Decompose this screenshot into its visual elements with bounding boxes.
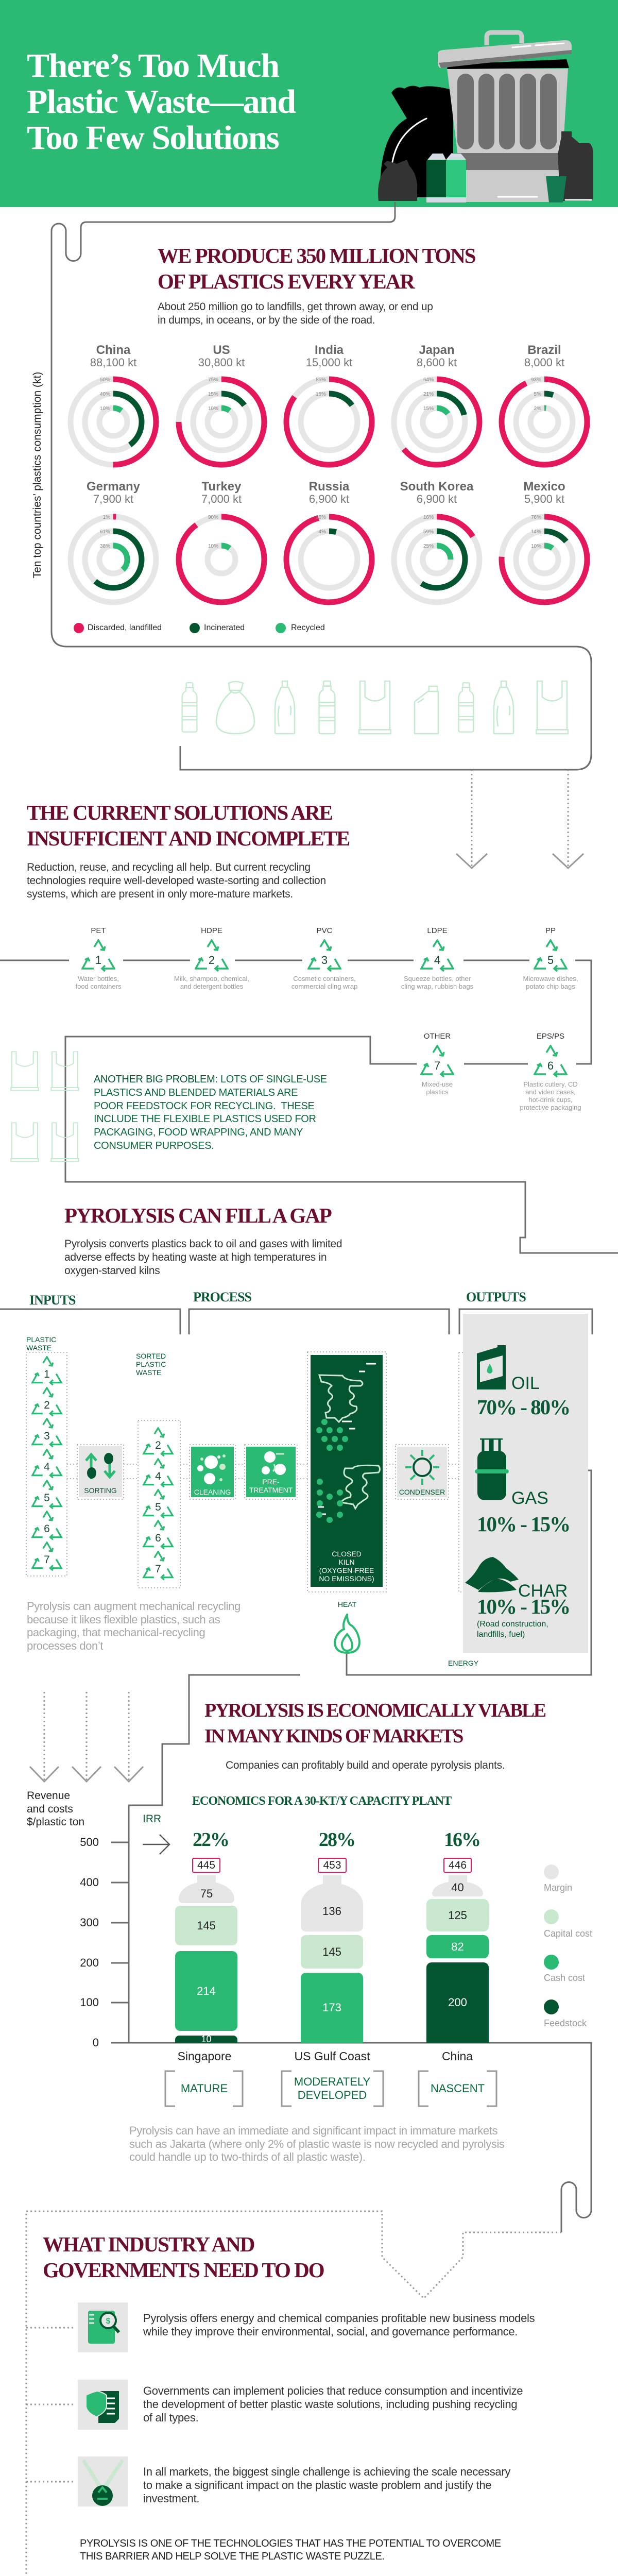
country names: 15,000 kt (306, 356, 352, 369)
Mexico (502, 515, 587, 602)
plastic waste stack: WASTE (26, 1344, 52, 1352)
country names: 7,900 kt (93, 493, 133, 505)
gray note: augment recycling: Pyrolysis can augment mechanical recycling (27, 1600, 241, 1613)
bar: China (426, 1875, 489, 2043)
recycling codes row: Milk, shampoo, chemical, (174, 975, 249, 982)
country names: US (213, 343, 230, 357)
closed kiln: CLOSED (332, 1550, 362, 1558)
heading: what industry and governments need to do: WHAT INDUSTRY AND (43, 2232, 254, 2256)
gray note: augment recycling: because it likes flexible plastics, such as (27, 1613, 220, 1626)
revenue boxes (192, 1858, 220, 1873)
Germany (71, 515, 156, 602)
market labels: MODERATELY (294, 2075, 370, 2088)
Brazil: 93% (531, 377, 541, 383)
gray note: jakarta: Pyrolysis can have an immediate and significant impact in immature markets (129, 2124, 497, 2137)
plastic waste stack: 3 (44, 1430, 50, 1442)
market labels: Singapore (178, 2049, 231, 2063)
market labels (165, 2049, 497, 2107)
heading: current solutions (27, 801, 349, 850)
recycling codes row: EPS/PS (537, 1032, 564, 1041)
Germany: 61% (100, 529, 110, 535)
recycling codes row: PVC (317, 926, 332, 935)
Russia: 96% (316, 515, 326, 520)
callout: another big problem: INCLUDE THE FLEXIBLE PLASTICS USED FOR (94, 1113, 316, 1125)
heading: economically viable: PYROLYSIS IS ECONOMICALLY VIABLE (204, 1700, 545, 1721)
heading: what industry and governments need to do (43, 2232, 324, 2282)
Japan: 21% (423, 392, 434, 397)
axis title: revenue and costs: and costs (27, 1803, 73, 1815)
Turkey: 10% (208, 544, 218, 549)
plastic waste stack: PLASTIC (26, 1335, 56, 1344)
item 3: scale challenge (78, 2456, 511, 2506)
axis title: revenue and costs: Revenue (27, 1790, 70, 1802)
heading: 350 million tons: OF PLASTICS EVERY YEAR (158, 269, 414, 293)
recycling codes row: food containers (76, 982, 121, 990)
y axis labels: 200 (80, 1956, 99, 1969)
recycling codes row: 6 (547, 1059, 554, 1072)
recycling codes row: Squeeze bottles, other (404, 975, 471, 982)
legend: cost components: Capital cost (544, 1928, 592, 1939)
country names: Germany (87, 480, 140, 494)
heading: current solutions: INSUFFICIENT AND INCOMPLETE (27, 826, 349, 850)
stacked bar chart: 446 (449, 1859, 467, 1871)
section labels: inputs process outputs (29, 1290, 526, 1308)
recycling codes row: plastics (426, 1088, 449, 1096)
bar: China: 125 (448, 1909, 467, 1922)
market labels: DEVELOPED (298, 2089, 367, 2102)
y axis labels: 0 (93, 2036, 99, 2049)
Turkey: 90% (208, 515, 218, 520)
Brazil: 5% (534, 392, 541, 397)
heading: pyrolysis gap: PYROLYSIS CAN FILL A GAP (64, 1204, 331, 1227)
country names: South Korea (400, 480, 473, 494)
closing statement: PYROLYSIS IS ONE OF THE TECHNOLOGIES THAT HAS THE POTENTIAL TO OVERCOME (80, 2538, 501, 2549)
callout: another big problem: PACKAGING, FOOD WRAPPING, AND MANY (94, 1127, 303, 1138)
heading: economically viable (204, 1700, 546, 1747)
country names: 8,600 kt (417, 356, 457, 369)
recycling codes row: potato chip bags (526, 982, 575, 990)
title: Plastic Waste—and (27, 83, 295, 121)
IRR label and arrow: IRR (143, 1813, 161, 1825)
icon: document with magnifier (78, 2302, 128, 2352)
Mexico: 14% (531, 529, 541, 535)
sorted plastic waste: 5 (155, 1501, 161, 1513)
bar: US Gulf Coast: 173 (322, 2001, 341, 2014)
pretreatment box: PRE- (262, 1478, 280, 1486)
plastic waste stack (26, 1335, 63, 1571)
legend: ring charts: Discarded, landfilled (88, 623, 162, 632)
plastic waste stack: 4 (44, 1461, 50, 1473)
output: oil (477, 1345, 570, 1419)
illustration: trash can with bags and bottles (378, 30, 593, 202)
heat flame: HEAT (338, 1600, 356, 1608)
country names: India (315, 343, 344, 357)
Turkey (179, 515, 264, 602)
Germany: 1% (103, 515, 110, 520)
South Korea: 25% (423, 544, 434, 549)
recycling codes row: Cosmetic containers, (293, 975, 356, 982)
header band (0, 0, 618, 207)
country names: Japan (419, 343, 455, 357)
plastic waste stack: 6 (44, 1523, 50, 1535)
recycling codes row: 2 (209, 954, 215, 967)
recycling codes row: Mixed-use (422, 1080, 453, 1088)
heading: what industry and governments need to do: GOVERNMENTS NEED TO DO (43, 2258, 324, 2282)
sorted plastic waste: SORTED (136, 1352, 166, 1360)
sorted plastic waste: 4 (155, 1470, 161, 1482)
section labels: inputs process outputs: INPUTS (29, 1293, 75, 1308)
text: pyrolysis: oxygen-starved kilns (64, 1265, 160, 1277)
text: current solutions: systems, which are present in only more-mature markets. (27, 888, 293, 900)
bar: US Gulf Coast: 136 (322, 1905, 341, 1918)
bar: US Gulf Coast (301, 1875, 363, 2043)
IRR values: 22% (193, 1829, 229, 1851)
gray note: augment recycling: packaging, that mechanical-recycling (27, 1626, 205, 1639)
US: 10% (208, 406, 218, 412)
output: gas (475, 1438, 570, 1536)
country names: 88,100 kt (90, 356, 136, 369)
South Korea (394, 515, 479, 602)
South Korea: 16% (423, 515, 434, 520)
bar: China: 40 (451, 1881, 464, 1894)
sorting box: SORTING (84, 1486, 117, 1495)
heading: current solutions: THE CURRENT SOLUTIONS ARE (27, 801, 332, 824)
recycling codes row: 4 (434, 954, 440, 967)
recycling codes row: hot-drink cups, (528, 1096, 573, 1104)
legend: ring charts: Recycled (291, 623, 325, 632)
Japan: 64% (423, 377, 434, 383)
country names: 6,900 kt (417, 493, 457, 505)
recycling codes row: HDPE (201, 926, 222, 935)
title: Too Few Solutions (27, 119, 279, 157)
intro text (158, 301, 433, 326)
sorted plastic waste (136, 1352, 174, 1581)
pretreatment box (246, 1447, 296, 1497)
icon: document with magnifier: $ (106, 2317, 111, 2326)
recycling codes row: protective packaging (520, 1104, 581, 1111)
Russia (286, 515, 372, 602)
icon: shield and document (78, 2380, 128, 2430)
item 2: government policies: Governments can implement policies that reduce consumption and incentivize (143, 2384, 523, 2397)
closed kiln (311, 1355, 383, 1587)
y axis labels: 100 (80, 1996, 99, 2009)
recycling codes row: 3 (321, 954, 328, 967)
item 2: government policies: the development of better plastic waste solutions, including pushing recycling (143, 2398, 517, 2411)
recycling codes row: OTHER (424, 1032, 451, 1041)
callout: another big problem: CONSUMER PURPOSES. (94, 1140, 214, 1151)
text: current solutions: Reduction, reuse, and recycling all help. But current recycling (27, 861, 311, 873)
IRR label and arrow (143, 1813, 170, 1855)
recycling codes row (75, 926, 581, 1111)
callout: another big problem: POOR FEEDSTOCK FOR RECYCLING. THESE (94, 1100, 315, 1112)
recycling codes row: and detergent bottles (180, 982, 243, 990)
callout: another big problem (94, 1074, 327, 1151)
condenser box (397, 1447, 447, 1497)
text: current solutions (27, 861, 326, 900)
gray note: augment recycling: processes don’t (27, 1639, 103, 1652)
closing statement (80, 2538, 501, 2562)
text: current solutions: technologies require well-developed waste-sorting and collection (27, 875, 326, 887)
gray note: jakarta: such as Jakarta (where only 2% of plastic waste is now recycled and pyrolysis (129, 2137, 505, 2150)
gray note: jakarta: could handle up to two-thirds of all plastic waste). (129, 2150, 366, 2163)
country names: 30,800 kt (198, 356, 245, 369)
market labels: NASCENT (431, 2082, 485, 2095)
legend: cost components (544, 1865, 592, 2028)
section labels: inputs process outputs: PROCESS (193, 1290, 251, 1304)
intro text: in dumps, in oceans, or by the side of the road. (158, 314, 375, 326)
ring charts (68, 376, 590, 605)
market labels: US Gulf Coast (295, 2049, 370, 2063)
outputs panel (463, 1314, 588, 1653)
heat flame (334, 1600, 360, 1654)
output: gas: 10% - 15% (477, 1512, 570, 1536)
plastic waste stack: 5 (44, 1492, 50, 1504)
legend: ring charts: Incinerated (204, 623, 245, 632)
sorted plastic waste: 2 (155, 1439, 161, 1451)
callout: another big problem: ANOTHER BIG PROBLEM: LOTS OF SINGLE-USE (94, 1074, 327, 1085)
recycling codes row: Plastic cutlery, CD (523, 1080, 578, 1088)
y axis labels: 400 (80, 1876, 99, 1889)
revenue boxes: 445 (197, 1859, 215, 1871)
item 1: business models: while they improve their environmental, social, and governance performance. (143, 2325, 518, 2338)
China: 40% (100, 392, 110, 397)
item 3: scale challenge: In all markets, the biggest single challenge is achieving the scale necessary (143, 2465, 510, 2478)
chart title: ECONOMICS FOR A 30-KT/Y CAPACITY PLANT (192, 1794, 451, 1808)
Brazil: 2% (534, 406, 541, 412)
US (179, 377, 264, 465)
sorted plastic waste: 7 (155, 1563, 161, 1575)
title: There’s Too Much (27, 47, 279, 84)
recycling codes row: Water bottles, (78, 975, 119, 982)
country names: Brazil (527, 343, 561, 357)
recycling codes row: 5 (547, 954, 554, 967)
bar: China: 200 (448, 1996, 467, 2009)
US: 75% (208, 377, 218, 383)
sorting box (79, 1446, 122, 1497)
axis title: revenue and costs (27, 1790, 84, 1828)
recycling codes row: PET (91, 926, 106, 935)
closed kiln: KILN (338, 1558, 355, 1566)
bar: Singapore: 214 (197, 1985, 216, 1997)
recycling codes row: LDPE (427, 926, 448, 935)
icons: row of plastic items (181, 680, 569, 735)
sorted plastic waste: PLASTIC (136, 1360, 166, 1368)
recycling codes row: PP (545, 926, 556, 935)
legend: cost components: Cash cost (544, 1973, 585, 1983)
recycling codes row: 7 (434, 1059, 440, 1072)
country names (87, 343, 565, 505)
plastic waste stack: 2 (44, 1399, 50, 1411)
bar: Singapore: 145 (197, 1919, 216, 1932)
output: oil: OIL (511, 1374, 540, 1393)
text: Ten top countries’ plastics consumption (kt) (31, 372, 43, 578)
callout: another big problem: PLASTICS AND BLENDED MATERIALS ARE (94, 1087, 298, 1098)
item 2: government policies: of all types. (143, 2411, 198, 2424)
stacked bar chart: 16% (444, 1829, 480, 1851)
icon: spotlight on recycling (78, 2456, 128, 2506)
output: gas: GAS (511, 1488, 548, 1508)
South Korea: 59% (423, 529, 434, 535)
Mexico: 10% (531, 544, 541, 549)
item 2: government policies (78, 2380, 523, 2430)
market labels: China (442, 2049, 473, 2063)
country names: Russia (309, 480, 349, 494)
closed kiln: NO EMISSIONS) (319, 1574, 374, 1583)
closed kiln: (OXYGEN-FREE (319, 1566, 374, 1574)
recycling codes row: and video cases, (525, 1088, 576, 1096)
country names: Turkey (202, 480, 241, 494)
gray note: jakarta (129, 2124, 505, 2163)
plastic waste stack: 7 (44, 1554, 50, 1566)
output: char: landfills, fuel) (477, 1630, 525, 1639)
closing statement: THIS BARRIER AND HELP SOLVE THE PLASTIC WASTE PUZZLE. (80, 2551, 385, 2562)
output: char: (Road construction, (477, 1620, 548, 1629)
heading: 350 million tons: WE PRODUCE 350 MILLION TONS (158, 244, 475, 267)
plastic waste stack: 1 (44, 1368, 50, 1380)
item 3: scale challenge: investment. (143, 2492, 199, 2505)
item 1: business models: Pyrolysis offers energy and chemical companies profitable new business models (143, 2312, 535, 2325)
legend: ring charts (74, 623, 325, 633)
text: pyrolysis: Pyrolysis converts plastics back to oil and gases with limited (64, 1238, 342, 1250)
cleaning box (191, 1447, 234, 1497)
China (71, 377, 156, 465)
country names: Mexico (523, 480, 565, 494)
legend: cost components: Feedstock (544, 2018, 587, 2028)
Mexico: 76% (531, 515, 541, 520)
stacked bar chart: 453 (323, 1859, 341, 1871)
country names: 7,000 kt (201, 493, 242, 505)
output: char: 10% - 15% (477, 1595, 570, 1618)
text: companies: Companies can profitably build and operate pyrolysis plants. (226, 1759, 505, 1771)
Japan: 15% (423, 406, 434, 412)
bar: Singapore: 75 (200, 1887, 213, 1900)
country names: China (96, 343, 130, 357)
output: oil: 70% - 80% (477, 1395, 570, 1419)
item 3: scale challenge: to make a significant impact on the plastic waste problem and justify the (143, 2479, 491, 2492)
legend: cost components: Margin (544, 1883, 572, 1893)
icons: plastic bags (10, 1051, 79, 1162)
country names: 8,000 kt (524, 356, 564, 369)
US: 15% (208, 392, 218, 397)
recycling codes row: Microwave dishes, (523, 975, 578, 982)
energy label: ENERGY (448, 1659, 478, 1667)
output: char: CHAR (518, 1581, 568, 1601)
Japan (394, 377, 479, 465)
bar: China: 82 (451, 1940, 464, 1953)
country names: 6,900 kt (309, 493, 349, 505)
y axis labels (80, 1836, 99, 2049)
sorted plastic waste: 6 (155, 1532, 161, 1544)
India: 85% (316, 377, 326, 383)
bar: Singapore (175, 1875, 237, 2043)
country names: 5,900 kt (524, 493, 564, 505)
China: 50% (100, 377, 110, 383)
text: pyrolysis: adverse effects by heating waste at high temperatures in (64, 1251, 327, 1263)
section labels: inputs process outputs: OUTPUTS (466, 1290, 526, 1304)
recycling codes row: 1 (95, 954, 101, 967)
bar: US Gulf Coast: 145 (322, 1945, 341, 1958)
condenser box: CONDENSER (399, 1488, 445, 1496)
gray note: augment recycling (27, 1600, 241, 1652)
item 1: business models (78, 2302, 535, 2352)
recycling codes row: commercial cling wrap (291, 982, 357, 990)
axis title: revenue and costs: $/plastic ton (27, 1816, 84, 1828)
Germany: 38% (100, 544, 110, 549)
y axis labels: 300 (80, 1916, 99, 1929)
recycling codes row: cling wrap, rubbish bags (401, 982, 473, 990)
intro text: About 250 million go to landfills, get thrown away, or end up (158, 301, 433, 313)
heading: 350 million tons (158, 244, 475, 293)
title (27, 47, 296, 157)
Russia: 4% (319, 529, 326, 535)
market labels: MATURE (181, 2082, 228, 2095)
stacked bar chart (80, 1813, 592, 2049)
India (286, 377, 372, 465)
output: char (465, 1557, 570, 1639)
stacked bar chart: 28% (319, 1829, 355, 1851)
Brazil (502, 377, 587, 465)
y axis labels: 500 (80, 1836, 99, 1849)
sorted plastic waste: WASTE (136, 1368, 161, 1377)
pretreatment box: TREATMENT (249, 1486, 293, 1494)
India: 15% (316, 392, 326, 397)
cleaning box: CLEANING (194, 1488, 231, 1496)
China: 10% (100, 406, 110, 412)
text: pyrolysis (64, 1238, 342, 1277)
heading: economically viable: IN MANY KINDS OF MARKETS (204, 1725, 462, 1747)
